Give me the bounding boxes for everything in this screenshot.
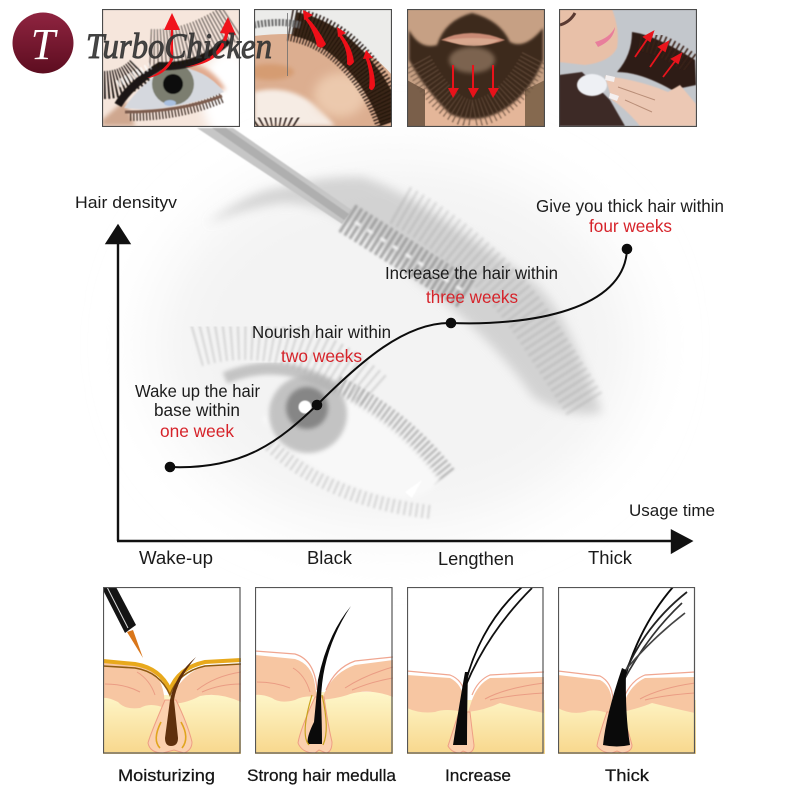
follicle — [298, 697, 332, 753]
follicle captions: Thick — [605, 766, 650, 785]
eyelashes — [196, 338, 445, 478]
milestone: week one: one week — [160, 421, 234, 441]
milestone: week four: Give you thick hair within — [536, 196, 724, 216]
follicle — [448, 712, 474, 753]
x axis stage labels: Thick — [588, 547, 633, 568]
x axis label: Usage time — [629, 501, 715, 520]
eyebrow — [207, 177, 602, 414]
follicle captions: Strong hair medulla — [247, 766, 397, 785]
follicle — [597, 712, 632, 753]
follicle — [148, 700, 192, 753]
logo watermark — [12, 12, 74, 74]
milestone: week four: four weeks — [589, 216, 672, 236]
hand — [605, 76, 696, 126]
hair shafts — [624, 587, 673, 680]
follicle panel: strong hair medulla — [255, 587, 393, 754]
frame — [104, 588, 240, 753]
curve point: week three — [446, 318, 456, 328]
photo: eyelashes — [102, 9, 240, 127]
x axis stage labels — [139, 547, 633, 569]
hair shaft — [308, 606, 351, 744]
mascara wand — [197, 128, 352, 224]
follicle captions — [118, 766, 650, 785]
milestone: week one: Wake up the hair — [135, 381, 260, 401]
hair with oil — [165, 657, 196, 746]
face — [559, 9, 618, 65]
background glow behind the chart — [155, 160, 635, 530]
milestone: week two: two weeks — [281, 346, 362, 366]
x axis with arrow — [117, 531, 691, 552]
red arrows — [448, 65, 499, 98]
milestone: week one — [135, 381, 260, 441]
follicle panel: moisturizing — [103, 587, 241, 754]
frame — [408, 10, 544, 126]
milestone: week one: base within — [154, 400, 240, 420]
milestone: week three — [385, 263, 558, 307]
frame — [408, 588, 543, 753]
curve point: week two — [312, 400, 322, 410]
logo circle — [12, 12, 74, 74]
beard — [409, 13, 543, 119]
milestone: week three: Increase the hair within — [385, 263, 558, 283]
x axis stage labels: Lengthen — [438, 548, 514, 569]
x axis stage labels: Wake-up — [139, 547, 213, 568]
curve point: week four — [622, 244, 632, 254]
milestone: week two: Nourish hair within — [252, 322, 391, 342]
follicle captions: Increase — [445, 766, 511, 785]
y axis with arrow — [107, 226, 129, 541]
follicle captions: Moisturizing — [118, 766, 215, 785]
upper lashes — [104, 22, 232, 116]
eyebrow hairs — [254, 22, 392, 122]
follicle panel: increase — [407, 587, 545, 754]
hair shafts — [465, 587, 522, 685]
thin guide line — [286, 13, 288, 76]
applicator — [103, 587, 136, 633]
watermark brand name: TurboChicken — [86, 26, 272, 66]
follicle panel: thick — [558, 587, 696, 754]
red arrows — [635, 32, 681, 77]
lips and chin — [441, 33, 505, 73]
photo: hair in hand — [559, 9, 697, 127]
frame — [256, 588, 392, 753]
logo letter T: T — [31, 20, 59, 69]
frame — [102, 10, 240, 126]
y axis label: Hair densityv — [75, 194, 178, 212]
growth curve — [165, 244, 632, 472]
lower lashes — [257, 119, 296, 126]
dark hair — [559, 72, 625, 126]
eye sclera and iris — [124, 63, 224, 110]
red arrows — [147, 13, 236, 78]
frame — [254, 10, 392, 126]
frame — [558, 588, 694, 753]
photo: eyebrow — [254, 9, 392, 127]
milestone: week four — [536, 196, 724, 236]
milestone: week two — [252, 322, 391, 366]
photo: beard — [407, 9, 545, 127]
curve point: week one — [165, 462, 175, 472]
illustration: faded eye and mascara brush — [196, 128, 602, 512]
oil layer — [103, 660, 241, 690]
mascara bristles — [347, 218, 468, 295]
x axis stage labels: Black — [307, 547, 353, 568]
milestone: week three: three weeks — [426, 287, 518, 307]
frame — [560, 10, 696, 126]
eye — [262, 375, 440, 512]
red arrows — [303, 10, 375, 90]
